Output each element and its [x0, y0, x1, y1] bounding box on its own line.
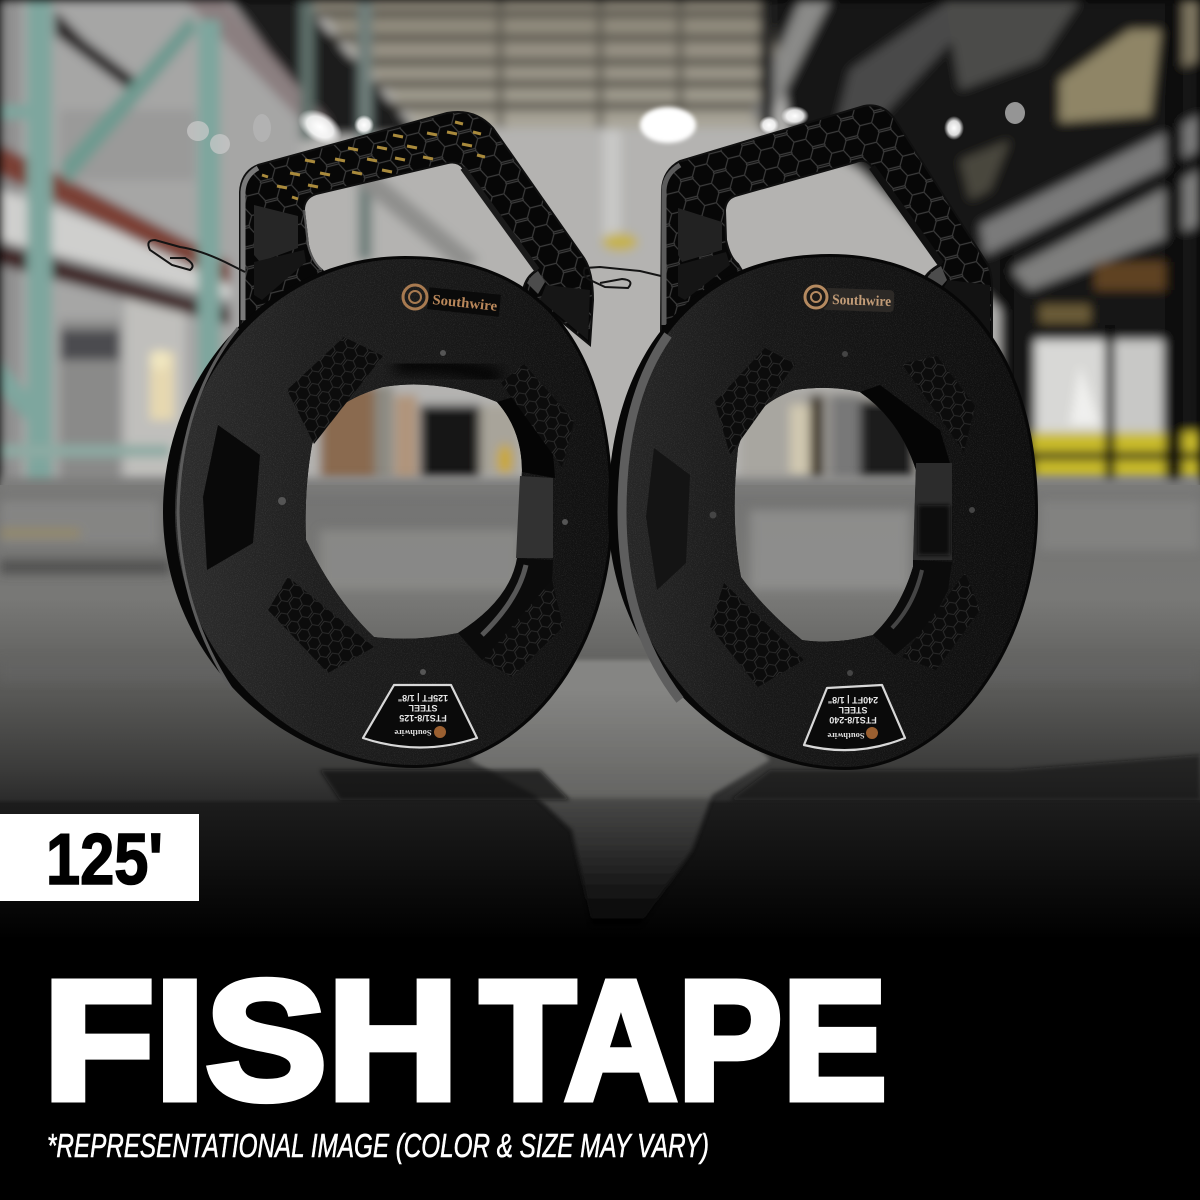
right reel tread panels [710, 348, 980, 687]
left fish tape reel [148, 112, 613, 768]
ceiling lights [640, 107, 696, 143]
left reel speckle [175, 259, 610, 765]
left handle gold inserts [262, 122, 485, 199]
left reel size label: 125FT | 1/8" [398, 693, 448, 703]
left reel rivets [278, 350, 568, 675]
title: TAPE [480, 946, 887, 1136]
right reel logo: Southwire [832, 292, 892, 310]
left reel size label [363, 685, 477, 748]
left reel size label: FTS1/8-125 [399, 713, 447, 723]
left reel handle [240, 112, 593, 345]
floor reflection funnel between reels [470, 660, 770, 925]
left reel inner wall [458, 395, 555, 660]
right reel wire hook [584, 267, 661, 288]
left reel size label: STEEL [408, 703, 438, 713]
right reel size label: STEEL [838, 705, 868, 715]
right reel size label: FTS1/8-240 [829, 715, 877, 725]
right reel rim highlight [622, 335, 680, 700]
right reel logo [802, 283, 894, 312]
title: FISH [43, 946, 459, 1136]
right reel size label: Southwire [827, 731, 865, 741]
right reel handle [661, 105, 992, 350]
left reel tread panels [268, 337, 574, 677]
left reel rim highlight [178, 328, 238, 690]
title [43, 946, 887, 1136]
reel reflections [320, 755, 1200, 800]
left reel warning panel [203, 425, 260, 570]
left reel body [163, 256, 613, 768]
disclaimer: *REPRESENTATIONAL IMAGE (COLOR & SIZE MAY VARY) [47, 1127, 709, 1164]
left reel wire hook [148, 240, 245, 272]
left reel logo [403, 285, 501, 317]
left reel logo: Southwire [432, 292, 498, 315]
right reel inner wall [860, 385, 952, 655]
floor [0, 485, 1200, 945]
left reel top shadow [395, 365, 500, 378]
left reel size label: Southwire [394, 728, 432, 738]
right reel size label: 240FT | 1/8" [828, 695, 878, 705]
right reel warning panel [646, 448, 690, 590]
right reel size label [804, 685, 905, 750]
right reel rivets [710, 351, 975, 676]
right fish tape reel [584, 105, 1038, 770]
size badge: 125' [46, 820, 163, 900]
size badge [0, 814, 199, 901]
right reel speckle [618, 257, 1035, 767]
right reel body [608, 254, 1038, 770]
